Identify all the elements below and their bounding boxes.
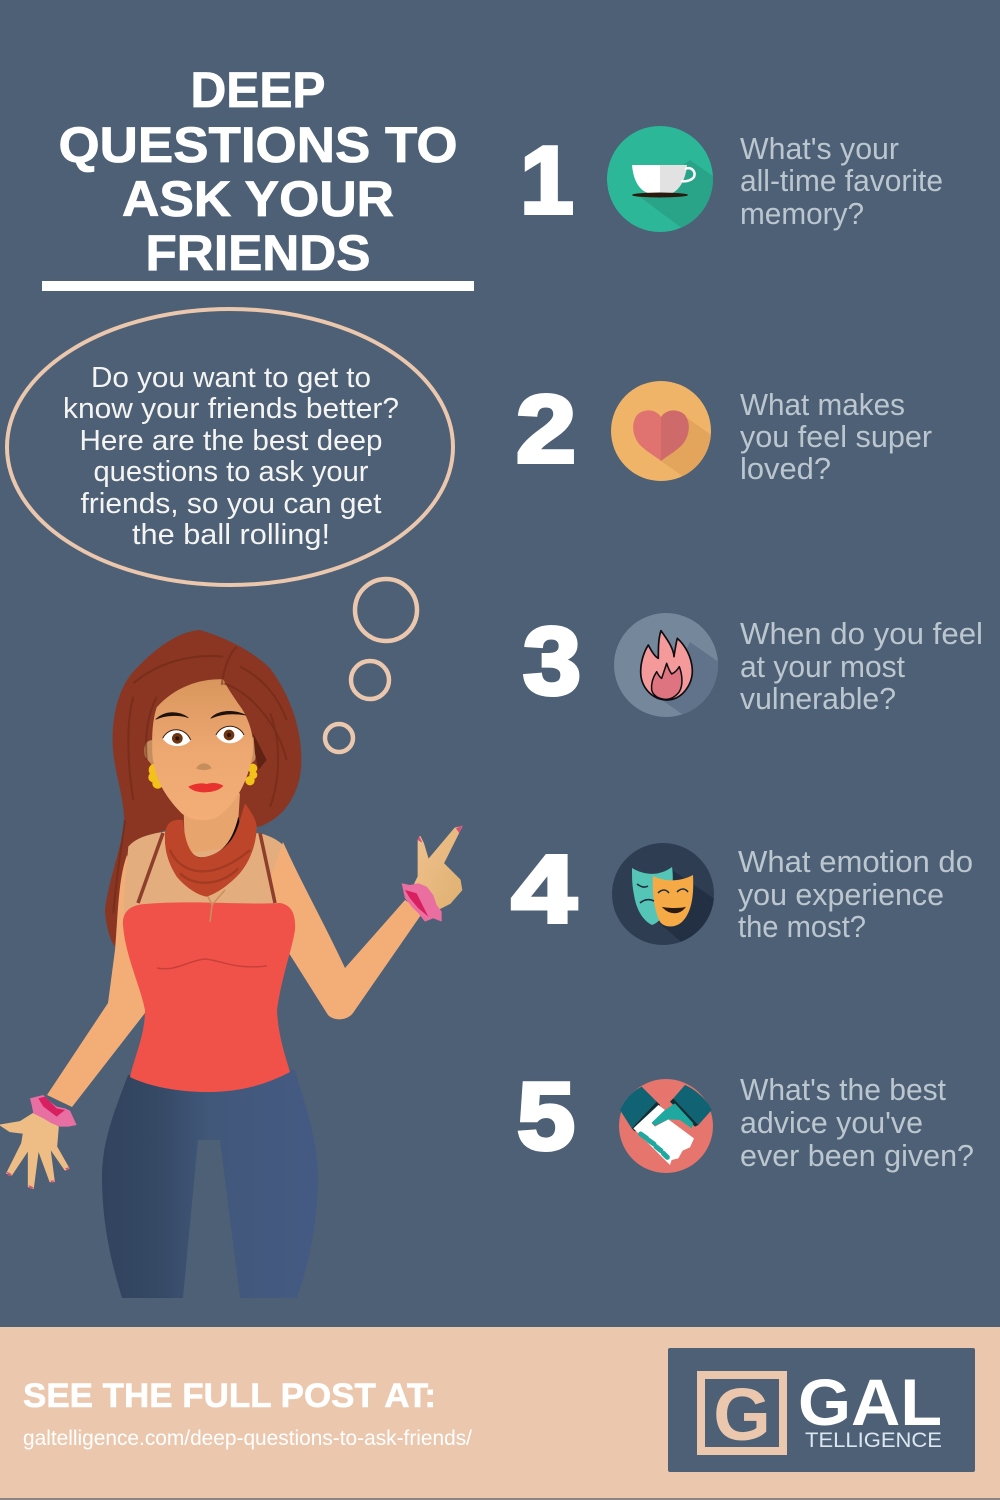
logo wordmark: GAL [798,1365,942,1439]
title: FRIENDS [146,225,370,281]
nails [7,1167,69,1189]
question 4 [738,844,973,944]
item 2 [518,381,932,481]
footer url: galtelligence.com/deep-questions-to-ask-friends/ [23,1427,472,1450]
number 2: 2 [516,376,576,483]
item 1 [524,126,942,232]
question 2: loved? [740,451,831,486]
question 1: memory? [740,196,864,231]
question 2: What makes [740,387,905,422]
straps [138,833,275,903]
question 1: What's your [740,131,899,166]
logo mark: G [713,1373,771,1456]
nose [196,763,212,770]
title underline [42,281,474,291]
bubble text: questions to ask your [94,456,369,488]
nails [418,825,463,843]
question 3 [740,616,983,716]
right hand pointing [415,827,462,910]
title: QUESTIONS TO [58,117,458,173]
title: ASK YOUR [122,171,394,227]
item 4 [510,843,972,945]
footer [0,1327,1000,1500]
question 1 [740,131,943,231]
question 4: you experience [738,877,944,912]
question 5 [740,1072,974,1173]
bubble text: the ball rolling! [132,519,330,551]
number 3: 3 [523,608,581,715]
hair back [105,630,301,947]
question 5: What's the best [740,1072,946,1107]
icon: handshake [619,1079,713,1173]
right scrunchie [402,883,442,922]
left arm [47,855,150,1107]
left scrunchie [30,1095,77,1127]
head group [113,647,463,922]
neck [183,793,240,853]
black collar [182,817,242,863]
necklace [204,888,225,922]
torso skin [123,832,293,920]
top crease [157,959,267,969]
icon: theatre masks [612,843,714,945]
logo [668,1348,975,1472]
ears [144,737,257,767]
bubble text: friends, so you can get [80,488,382,520]
thought bubbles [325,579,417,752]
scarf folds [170,850,250,883]
question 1: all-time favorite [740,163,943,198]
question 4: the most? [738,909,866,944]
question 5: ever been given? [740,1138,974,1173]
lips [188,783,223,792]
eyes [163,726,244,746]
question 3: When do you feel [740,616,983,651]
logo wordmark: TELLIGENCE [805,1429,942,1452]
bubble text [63,362,399,551]
left hand and scrunchie [0,1095,77,1189]
illustration: woman [0,630,463,1298]
jeans [102,1070,318,1298]
icon: flame [614,613,718,717]
bubble text: know your friends better? [63,393,399,425]
left hand [0,1113,69,1188]
red top [123,902,295,1092]
question 3: vulnerable? [740,681,896,716]
footer heading: SEE THE FULL POST AT: [23,1377,436,1415]
number 1: 1 [520,127,574,234]
scarf [165,803,257,897]
question 3: at your most [740,649,905,684]
title [58,62,458,281]
speech bubble [7,309,453,585]
hair shadow beside face [253,733,267,770]
question 4: What emotion do [738,844,973,879]
face [152,679,253,820]
earrings [148,764,257,789]
icon: coffee cup [607,126,713,232]
item 3 [523,613,981,717]
title: DEEP [190,62,326,118]
icon: heart [611,381,711,481]
item 5 [517,1063,974,1173]
question 5: advice you've [740,1105,923,1140]
eyebrows [156,711,246,719]
bubble text: Here are the best deep [80,425,382,457]
number 5: 5 [517,1063,575,1170]
question 2: you feel super [740,419,932,454]
right arm [270,842,423,1019]
number 4: 4 [512,836,576,943]
question 2 [740,387,932,486]
hair strands [113,647,287,913]
bubble text: Do you want to get to [91,362,371,394]
